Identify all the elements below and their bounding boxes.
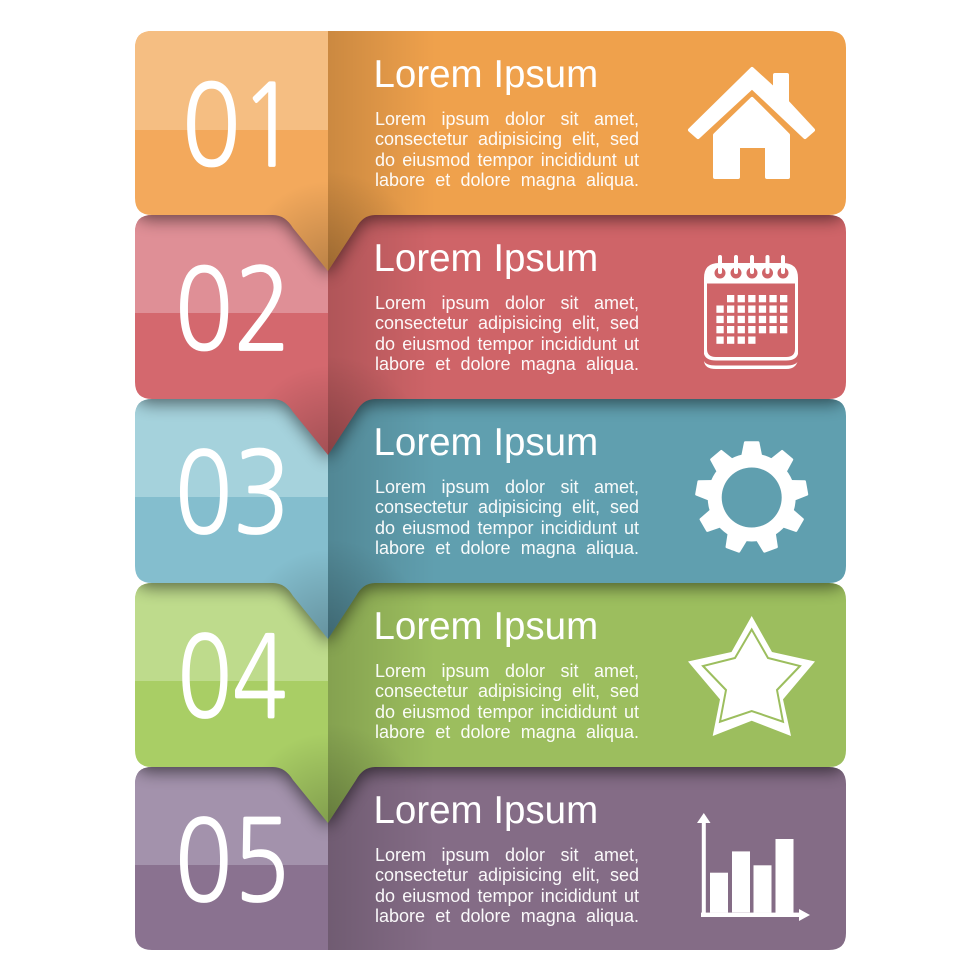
body text: labore et dolore magna aliqua.: [375, 538, 639, 558]
number 02: 02: [174, 253, 292, 367]
panel: step 02: [135, 215, 846, 455]
panel: step 05: [135, 767, 846, 950]
body text: do eiusmod tempor incididunt ut: [375, 334, 639, 354]
body text: Lorem ipsum dolor sit amet,: [375, 293, 639, 313]
body text: Lorem ipsum dolor sit amet,: [375, 845, 639, 865]
heading: Lorem Ipsum: [374, 53, 598, 96]
body text: consectetur adipisicing elit, sed: [375, 865, 639, 885]
body text: Lorem ipsum dolor sit amet,: [375, 661, 639, 681]
panel: step 04: [135, 583, 846, 823]
heading: Lorem Ipsum: [374, 421, 598, 464]
body text: labore et dolore magna aliqua.: [375, 722, 639, 742]
body text: [375, 661, 639, 742]
body text: do eiusmod tempor incididunt ut: [375, 886, 639, 906]
body text: [375, 293, 639, 374]
heading: Lorem Ipsum: [374, 605, 598, 648]
number 01: 01: [182, 69, 299, 183]
icon: bar chart: [697, 813, 810, 921]
heading: Lorem Ipsum: [374, 237, 598, 280]
body text: consectetur adipisicing elit, sed: [375, 313, 639, 333]
number 04: 04: [177, 620, 288, 734]
body text: Lorem ipsum dolor sit amet,: [375, 477, 639, 497]
icon: star: [688, 616, 815, 736]
body text: labore et dolore magna aliqua.: [375, 906, 639, 926]
body text: consectetur adipisicing elit, sed: [375, 129, 639, 149]
body text: [375, 845, 639, 926]
body text: labore et dolore magna aliqua.: [375, 354, 639, 374]
body text: labore et dolore magna aliqua.: [375, 170, 639, 190]
body text: do eiusmod tempor incididunt ut: [375, 702, 639, 722]
body text: do eiusmod tempor incididunt ut: [375, 150, 639, 170]
body text: [375, 477, 639, 558]
body text: [375, 109, 639, 190]
body text: do eiusmod tempor incididunt ut: [375, 518, 639, 538]
icon: calendar: [704, 257, 798, 369]
number 05: 05: [174, 805, 291, 919]
icon: house: [690, 69, 813, 177]
panel: step 01: [135, 31, 846, 271]
body text: consectetur adipisicing elit, sed: [375, 681, 639, 701]
body text: consectetur adipisicing elit, sed: [375, 497, 639, 517]
body text: Lorem ipsum dolor sit amet,: [375, 109, 639, 129]
heading: Lorem Ipsum: [374, 789, 598, 832]
icon: gear: [696, 442, 808, 552]
panel: step 03: [135, 399, 846, 639]
number 03: 03: [174, 437, 291, 551]
